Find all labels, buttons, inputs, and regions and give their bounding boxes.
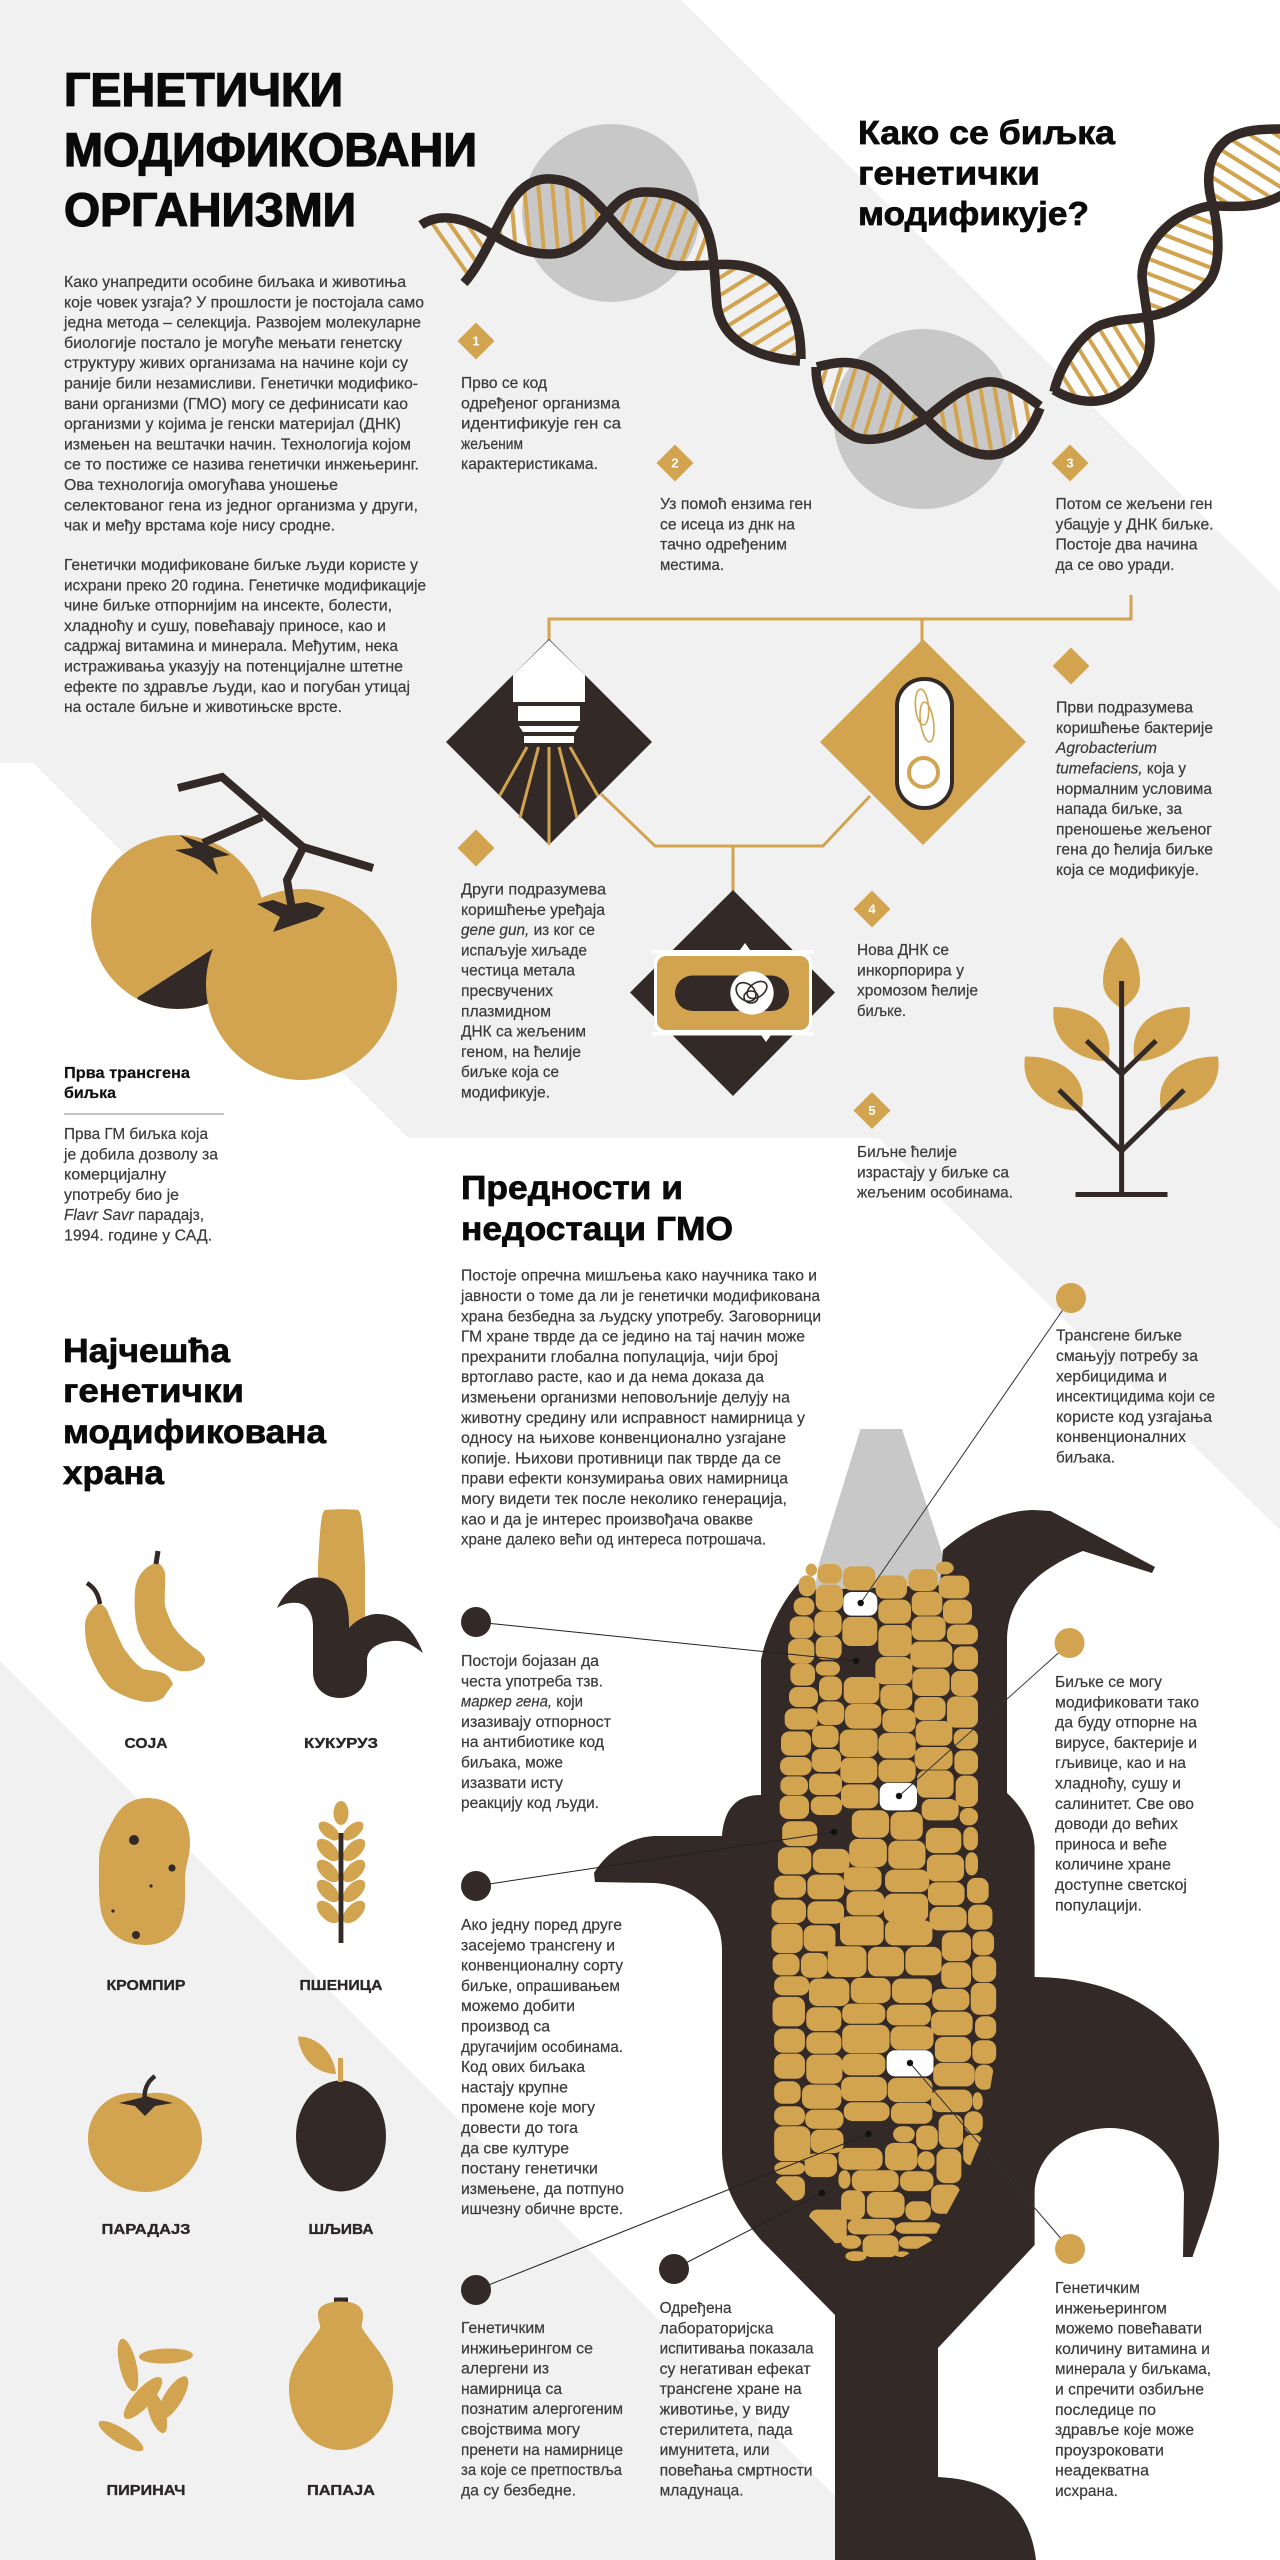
method 2 text: биљке која се (461, 1064, 559, 1081)
method 1 text: Agrobacterium (1055, 740, 1157, 757)
callout: resistance: популацији. (1055, 1897, 1142, 1914)
text: pros and cons: јавности о томе да ли је генетички модификована (460, 1288, 820, 1305)
step 2: тачно одређеним (660, 537, 787, 554)
method 1 text: tumefaciens, која у (1056, 760, 1186, 778)
text: first transgenic plant: биљка (64, 1085, 116, 1102)
callout: lab tests (659, 2190, 825, 2500)
method 2 text: плазмидном (461, 1003, 551, 1020)
intro text: селектованог гена из једног организма у други, (64, 497, 418, 514)
icon: plant (1024, 937, 1219, 1197)
text: first transgenic plant: је добила дозволу за (63, 1146, 218, 1163)
icon: DNA helix 2 (816, 362, 1040, 455)
intro text: које човек узгаја? У прошлости је постојала само (64, 294, 424, 311)
corn kernels: lower (775, 2051, 993, 2261)
heading: pros and cons (461, 1169, 733, 1247)
step 2: Уз помоћ ензима ген (660, 496, 812, 513)
step 4: 4 (868, 902, 876, 916)
method 2 text: коришћење уређаја (461, 902, 605, 919)
step 3: да се ово уради. (1056, 557, 1174, 574)
heading: how plant is modified: Како се биљка (858, 114, 1116, 151)
callout: cross-pollination: можемо добити (461, 1998, 575, 2015)
label: soy: СОЈА (124, 1735, 168, 1752)
intro text: биологије постало је могуће мењати генетску (64, 335, 402, 352)
callout: lab tests: имунитета, или (660, 2442, 770, 2459)
callout: allergens: познатим алергогеним (461, 2401, 623, 2418)
callout: allergens: да су безбедне. (461, 2482, 576, 2499)
callout: cross-pollination: да све културе (461, 2140, 569, 2157)
step 1: жељеним (461, 436, 523, 453)
callout: cross-pollination: производ са (461, 2018, 550, 2036)
callout: resistance: доступне светској (1055, 1877, 1187, 1894)
method 1 text: напада биљке, за (1056, 801, 1182, 818)
icon: soy (85, 1551, 205, 1702)
callout: cross-pollination (461, 1829, 837, 2218)
callout: allergens: алергени из (461, 2361, 549, 2378)
callout: cross-pollination: настају крупне (461, 2079, 568, 2096)
callout: marker genes: честа употреба тзв. (461, 1673, 603, 1690)
callout: lab tests: лабораторијска (660, 2320, 774, 2337)
title: ОРГАНИЗМИ (64, 183, 356, 236)
callout: lab tests: животиње, у виду (660, 2402, 790, 2418)
intro text: се то постиже се назива генетички инжењеринг. (64, 457, 419, 474)
method 2 text: геном, на ћелије (461, 1044, 581, 1061)
callout: resistance: модификовати тако (1055, 1694, 1199, 1711)
text: pros and cons: могу видети тек после неколико генерација, (461, 1491, 787, 1508)
text: first transgenic plant: употребу био је (64, 1187, 179, 1204)
text: pros and cons: животну средину или исправност намирница у (461, 1410, 805, 1427)
callout: cross-pollination: конвенционалну сорту (461, 1958, 623, 1975)
callout: lab tests: трансгене хране на (660, 2381, 802, 2398)
icon: cell diamond (630, 890, 835, 1096)
callout: cross-pollination: Ако једну поред друге (461, 1917, 622, 1934)
callout: resistance: гљивице, као и на (1055, 1755, 1186, 1772)
intro text: Генетички модификоване биљке људи користе у (64, 557, 418, 574)
step 2: 2 (671, 456, 679, 470)
callout: cross-pollination: засејемо трансгену и (461, 1937, 615, 1954)
label: papaya: ПАПАЈА (307, 2482, 375, 2499)
text: pros and cons: односу на њихове конвенционално узгајане (461, 1430, 786, 1447)
label: potato: КРОМПИР (106, 1977, 186, 1994)
callout: reduced herbicides: конвенционалних (1056, 1429, 1186, 1446)
callout: marker genes: изазвати исту (461, 1775, 563, 1792)
callout: cross-pollination: промене које могу (461, 2100, 595, 2117)
text: pros and cons: ГМ хране тврде да се једино на тај начин може (461, 1329, 805, 1346)
callout: marker genes: Постоји бојазан да (461, 1653, 599, 1670)
corn kernels: upper (780, 1562, 978, 1825)
method 1 text: гена до ћелија биљке (1056, 842, 1213, 859)
text: first transgenic plant: Прва ГМ биљка која (64, 1126, 208, 1143)
intro text: измењен на вештачки начин. Технологија којом (64, 436, 411, 453)
step 3: убацује у ДНК биљке. (1056, 516, 1214, 533)
callout: vitamins: и спречити озбиљне (1055, 2382, 1204, 2398)
callout: vitamins: последице по (1055, 2402, 1156, 2419)
step 4: инкорпорира у (857, 962, 964, 979)
callout: cross-pollination: ишчезну обичне врсте. (461, 2201, 623, 2218)
step 2 (656, 444, 812, 574)
heading: pros and cons: Предности и (461, 1169, 683, 1206)
text: first transgenic plant: Прва трансгена (64, 1065, 190, 1082)
heading: most common GM food: генетички (63, 1372, 244, 1409)
corn kernels: middle (772, 1811, 996, 2063)
text: pros and cons: измењени организми неповољније делују на (461, 1390, 790, 1406)
step 3: Потом се жељени ген (1056, 496, 1212, 513)
label: plum: ШЉИВА (308, 2221, 374, 2238)
method 1 text: коришћење бактерије (1056, 720, 1213, 737)
step 1: Прво се код (461, 375, 547, 392)
callout: resistance: салинитет. Све ово (1055, 1796, 1194, 1813)
callout: marker genes: маркер гена, који (461, 1694, 583, 1711)
intro text: структуру живих организама на начине који су (64, 355, 408, 372)
callout: reduced herbicides (858, 1283, 1215, 1606)
heading: pros and cons: недостаци ГМО (461, 1210, 733, 1247)
callout: vitamins: минерала у биљкама, (1055, 2361, 1211, 2378)
heading: most common GM food: Најчешћа (63, 1332, 231, 1369)
text: pros and cons: храна безбедна за људску употребу. Заговорници (461, 1308, 821, 1325)
method 1 text: која се модификује. (1056, 862, 1199, 879)
method 2 text: ДНК са жељеним (461, 1024, 586, 1041)
step 2: се исеца из днк на (660, 516, 795, 533)
callout: vitamins: здравље које може (1055, 2422, 1194, 2439)
step 4: биљке. (857, 1003, 906, 1020)
gray circle: second helix (834, 329, 1014, 509)
callout: resistance: приноса и веће (1055, 1836, 1167, 1853)
step 4: Нова ДНК се (857, 942, 949, 959)
callout: cross-pollination: постану генетички (461, 2161, 598, 2178)
step 1 (458, 322, 621, 473)
text: pros and cons: Постоје опречна мишљења како научника тако и (461, 1268, 817, 1285)
text: first transgenic plant: Flavr Savr парадајз, (64, 1207, 204, 1224)
intro text: садржај витамина и минерала. Међутим, нека (64, 638, 398, 655)
icon: corn small (277, 1509, 423, 1698)
gray circle: first helix (522, 124, 700, 302)
step 3: 3 (1066, 456, 1074, 470)
icon: DNA helix 1 (420, 179, 801, 361)
text: pros and cons: као и да је интерес произвођача овакве (461, 1511, 753, 1528)
callout: marker genes (461, 1607, 859, 1812)
icon: plum (296, 2036, 386, 2192)
icon: rice (95, 2337, 194, 2456)
method 1 text (1052, 648, 1213, 879)
intro text: вани организми (ГМО) могу се дефинисати као (64, 396, 408, 413)
icon: agrobacterium diamond (820, 639, 1026, 845)
heading: most common GM food (63, 1332, 327, 1491)
step 5: израстају у биљке са (857, 1164, 1009, 1181)
callout: lab tests: стерилитета, пада (660, 2422, 793, 2439)
step 4 (854, 890, 978, 1020)
text: pros and cons: хране далеко већи од интереса потрошача. (461, 1532, 766, 1549)
method 2 text: честица метала (461, 963, 575, 980)
text: pros and cons: вртоглаво расте, као и да нема доказа да (461, 1369, 764, 1386)
callout: vitamins: Генетичким (1055, 2280, 1140, 2297)
method 2 text: модификује. (461, 1084, 550, 1102)
callout: marker genes: биљака, може (461, 1754, 563, 1772)
callout: reduced herbicides: инсектицидима који се (1056, 1389, 1215, 1406)
callout: cross-pollination: Код ових биљака (461, 2059, 585, 2076)
callout: vitamins: проузроковати (1055, 2442, 1164, 2459)
intro text: раније били незамисливи. Генетички модифико- (64, 376, 418, 392)
intro text: ефекте по здравље људи, као и погубан утицај (64, 679, 410, 696)
icon: papaya (289, 2298, 393, 2450)
title: МОДИФИКОВАНИ (64, 123, 477, 176)
callout: vitamins: количину витамина и (1055, 2341, 1210, 2358)
icon: wheat (313, 1801, 369, 1943)
step 5: 5 (868, 1103, 876, 1118)
callout: allergens: Генетичким (461, 2320, 545, 2337)
text: first transgenic plant (63, 1065, 224, 1244)
intro text: Ова технологија омогућава уношење (64, 477, 338, 494)
heading: most common GM food: храна (63, 1454, 165, 1491)
heading: how plant is modified: генетички (858, 154, 1040, 192)
step 1: 1 (472, 334, 480, 348)
method 2 text: пресвучених (461, 983, 553, 1000)
step 3 (1052, 444, 1214, 574)
callout: cross-pollination: другачијим особинама. (461, 2039, 623, 2056)
method 1 text: преношење жељеног (1056, 821, 1212, 838)
callout: resistance: да буду отпорне на (1055, 1715, 1197, 1732)
method 1 text: Први подразумева (1056, 700, 1193, 717)
callout: vitamins: можемо повећавати (1055, 2321, 1202, 2338)
label: rice: ПИРИНАЧ (106, 2482, 186, 2499)
step 5: жељеним особинама. (857, 1185, 1013, 1202)
connector lines (549, 595, 1131, 891)
icon: tomato (88, 2076, 202, 2192)
callout: allergens: својствима могу (461, 2422, 580, 2438)
method 2 text: испаљује хиљаде (461, 942, 587, 959)
method 2 text (458, 830, 606, 1102)
icon: DNA helix 3 (1054, 129, 1280, 401)
callout: allergens: пренети на намирнице (461, 2442, 623, 2459)
text: first transgenic plant: 1994. године у САД. (64, 1228, 212, 1244)
callout: resistance: количине хране (1055, 1857, 1171, 1874)
callout: resistance: вирусе, бактерије и (1055, 1735, 1197, 1752)
callout: cross-pollination: измењене, да потпуно (461, 2181, 624, 2198)
callout: lab tests: повећања смртности (660, 2462, 813, 2479)
intro text: чак и међу врстама које нису сродне. (64, 518, 335, 535)
callout: cross-pollination: биљке, опрашивањем (461, 1978, 620, 1995)
callout: resistance: хладноћу, сушу и (1055, 1776, 1181, 1792)
callout: lab tests: Одређена (660, 2300, 732, 2317)
intro text (63, 274, 426, 716)
step 2: местима. (660, 557, 724, 574)
intro text: истраживања указују на потенцијалне штетне (64, 658, 403, 676)
callout: reduced herbicides: користе код узгајања (1056, 1409, 1212, 1426)
step 1: идентификује ген са (461, 416, 621, 433)
label: wheat: ПШЕНИЦА (300, 1977, 383, 1994)
intro text: исхрани преко 20 година. Генетичке модификације (64, 577, 426, 594)
callout: reduced herbicides: биљака. (1056, 1450, 1115, 1466)
callout: allergens: за које се претпоствља (461, 2462, 622, 2479)
step 4: хромозом ћелије (857, 983, 978, 1000)
text: first transgenic plant: комерцијалну (64, 1167, 166, 1184)
callout: cross-pollination: довести до тога (461, 2120, 578, 2137)
text: pros and cons: прехранити глобална популација, чији број (461, 1349, 778, 1366)
title: ГЕНЕТИЧКИ (64, 63, 343, 116)
method 2 text: gene gun, из ког се (461, 922, 595, 939)
callout: lab tests: испитивања показала (660, 2341, 814, 2358)
callout: reduced herbicides: хербицидима и (1056, 1368, 1167, 1385)
callout: lab tests: су негативан ефекат (660, 2361, 811, 2378)
intro text: организми у којима је генски материјал (ДНК) (64, 416, 401, 433)
title (64, 63, 477, 236)
callout: allergens: намирница са (461, 2381, 562, 2398)
heading: how plant is modified (858, 114, 1116, 232)
text: pros and cons: копије. Њихови противници пак тврде да се (461, 1450, 781, 1467)
callout: resistance: доводи до већих (1055, 1816, 1178, 1833)
callout: marker genes: реакцију код људи. (461, 1795, 599, 1812)
icon: transgenic tomato (91, 777, 397, 1080)
intro text: Како унапредити особине биљака и животиња (64, 274, 406, 291)
callout: reduced herbicides: Трансгене биљке (1056, 1328, 1182, 1345)
large corn illustration (594, 1429, 1219, 2560)
callout: vitamins: исхрана. (1055, 2483, 1118, 2500)
intro text: чине биљке отпорнијим на инсекте, болести, (64, 598, 392, 615)
icon: potato (99, 1798, 190, 1945)
icon: gene gun diamond (446, 639, 652, 845)
callout: vitamins (907, 2060, 1211, 2500)
callout: vitamins: инжењерингом (1055, 2300, 1167, 2317)
step 5: Биљне ћелије (857, 1144, 957, 1161)
intro text: једна метода – селекција. Развојем молекуларне (63, 315, 421, 332)
label: corn: КУКУРУЗ (304, 1735, 378, 1752)
method 2 text: Други подразумева (461, 882, 606, 898)
callout: marker genes: на антибиотике код (461, 1734, 604, 1751)
text: pros and cons: прави ефекти конзумирања ових намирница (461, 1471, 788, 1488)
callout: lab tests: младунаца. (660, 2483, 744, 2500)
step 3: Постоје два начина (1056, 537, 1198, 554)
callout: vitamins: неадекватна (1055, 2463, 1149, 2480)
step 1: одређеног организма (461, 395, 620, 412)
step 5 (854, 1092, 1013, 1202)
intro text: на остале биљне и животињске врсте. (64, 699, 342, 716)
label: tomato: ПАРАДАЈЗ (102, 2221, 190, 2238)
callout: reduced herbicides: смањују потребу за (1056, 1348, 1198, 1365)
heading: how plant is modified: модификује? (858, 195, 1089, 232)
callout: allergens (461, 2131, 872, 2499)
heading: most common GM food: модификована (63, 1413, 327, 1450)
text: pros and cons (460, 1268, 821, 1549)
method 1 text: нормалним условима (1056, 781, 1212, 798)
intro text: хладноћу и сушу, повећавају приносе, као и (64, 618, 386, 635)
step 1: карактеристикама. (461, 456, 598, 473)
callout: marker genes: изазивају отпорност (461, 1714, 611, 1731)
callout: resistance: Биљке се могу (1055, 1674, 1162, 1691)
callout: allergens: инжињерингом се (461, 2340, 593, 2357)
callout: resistance (896, 1628, 1199, 1914)
